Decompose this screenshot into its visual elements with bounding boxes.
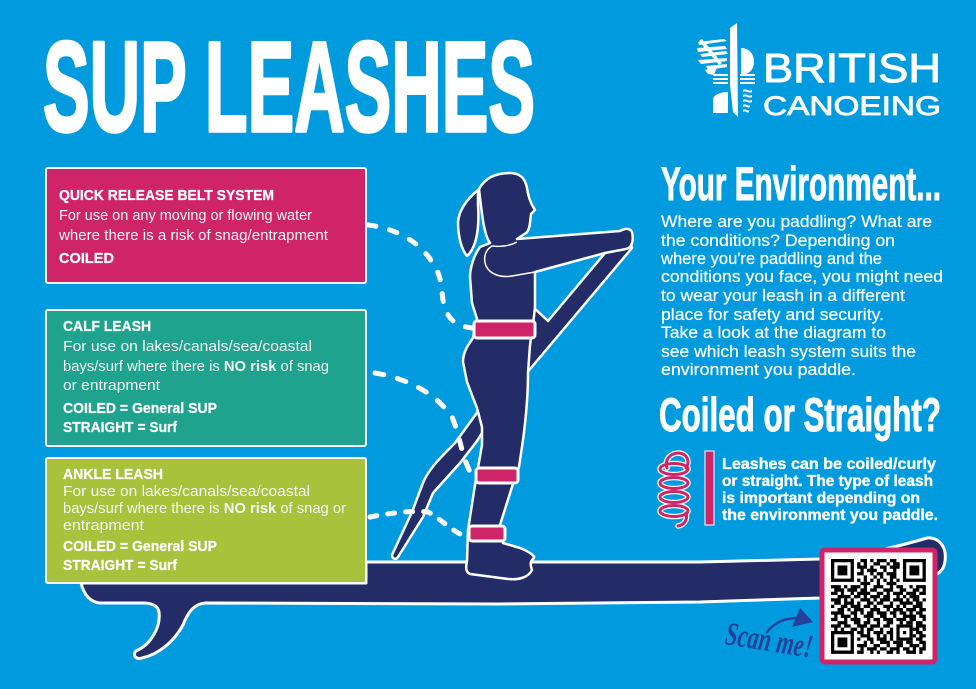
calf band: [476, 468, 518, 483]
text block: coiled or straight: or straight. The type of leash: [722, 473, 933, 490]
panel body text: or entrapment: [63, 377, 161, 394]
panel background: [46, 310, 366, 446]
panel: calf leash: [46, 310, 366, 446]
paddle shaft: [525, 232, 632, 375]
panel: ankle leash: [46, 458, 366, 583]
leash types: [63, 400, 217, 436]
logo wordmark: Canoeing: CANOEING: [763, 91, 941, 121]
leash types: COILED = General SUP: [63, 538, 217, 555]
logo: British Canoeing: [697, 23, 941, 121]
text block: coiled or straight: the environment you paddle.: [722, 507, 938, 524]
arrow: scan me: [767, 608, 813, 632]
panel heading: CALF LEASH: [63, 318, 151, 335]
text block: your environment: the conditions? Depending on: [661, 232, 895, 250]
text block: your environment: conditions you face, you might need: [661, 268, 943, 286]
panel body text: For use on any moving or flowing water: [59, 207, 312, 224]
text block: coiled or straight: is important depending on: [722, 490, 920, 507]
QR code: [831, 559, 926, 654]
ankle band: [469, 526, 505, 541]
panel body text: bays/surf where there is NO risk of snag or: [63, 500, 346, 517]
panel: quick release belt system: [46, 168, 366, 283]
QR code panel: [822, 550, 935, 662]
panel body text: [58, 207, 329, 244]
panel body text: For use on lakes/canals/sea/coastal: [63, 338, 312, 355]
person with paddle: [392, 173, 633, 579]
arm outline: [485, 242, 535, 277]
leash types: STRAIGHT = Surf: [63, 557, 178, 574]
panel body text: entrapment: [63, 517, 145, 534]
panel body text: [63, 483, 346, 534]
panel heading: QUICK RELEASE BELT SYSTEM: [59, 187, 274, 204]
icon: coiled leash: [660, 453, 688, 526]
divider bar: [705, 451, 714, 525]
panel body text: [63, 338, 329, 394]
belt band: [474, 321, 535, 338]
panel heading: ANKLE LEASH: [63, 466, 163, 483]
leash types: COILED = General SUP: [63, 400, 217, 417]
text block: coiled or straight: [722, 456, 938, 524]
scan me label: Scan me!: [723, 616, 815, 666]
text block: your environment: Take a look at the diagram to: [661, 324, 886, 342]
leash types: [63, 538, 217, 574]
panel background: [46, 458, 366, 583]
ponytail: [458, 190, 478, 256]
QR frame: [822, 550, 935, 662]
icon: logo emblem: [697, 23, 755, 117]
leash type: COILED: [59, 250, 114, 267]
connector: ankle leash: [370, 511, 467, 537]
logo wordmark: British: BRITISH: [763, 45, 941, 91]
text block: your environment: [660, 213, 943, 379]
connector: belt leash: [368, 225, 472, 328]
text block: your environment: where you're paddling and the: [660, 250, 882, 268]
text block: your environment: place for safety and security.: [661, 306, 884, 324]
connector: calf leash: [375, 373, 473, 477]
panel body text: where there is a risk of snag/entrapment: [58, 227, 329, 244]
text block: your environment: see which leash system suits the: [661, 343, 916, 361]
text block: coiled or straight: Leashes can be coiled/curly: [722, 456, 936, 473]
text block: your environment: to wear your leash in a different: [661, 287, 905, 305]
body silhouette: [463, 173, 633, 579]
leash types: STRAIGHT = Surf: [63, 419, 178, 436]
title: SUP LEASHES: [43, 16, 535, 159]
text block: your environment: Where are you paddling? What are: [661, 213, 932, 231]
paddle board: [81, 538, 945, 658]
paddle lower blade: [392, 410, 490, 559]
panel background: [46, 168, 366, 283]
text block: your environment: environment you paddle.: [661, 361, 856, 379]
panel body text: bays/surf where there is NO risk of snag: [63, 358, 329, 375]
panel body text: For use on lakes/canals/sea/coastal: [63, 483, 310, 500]
